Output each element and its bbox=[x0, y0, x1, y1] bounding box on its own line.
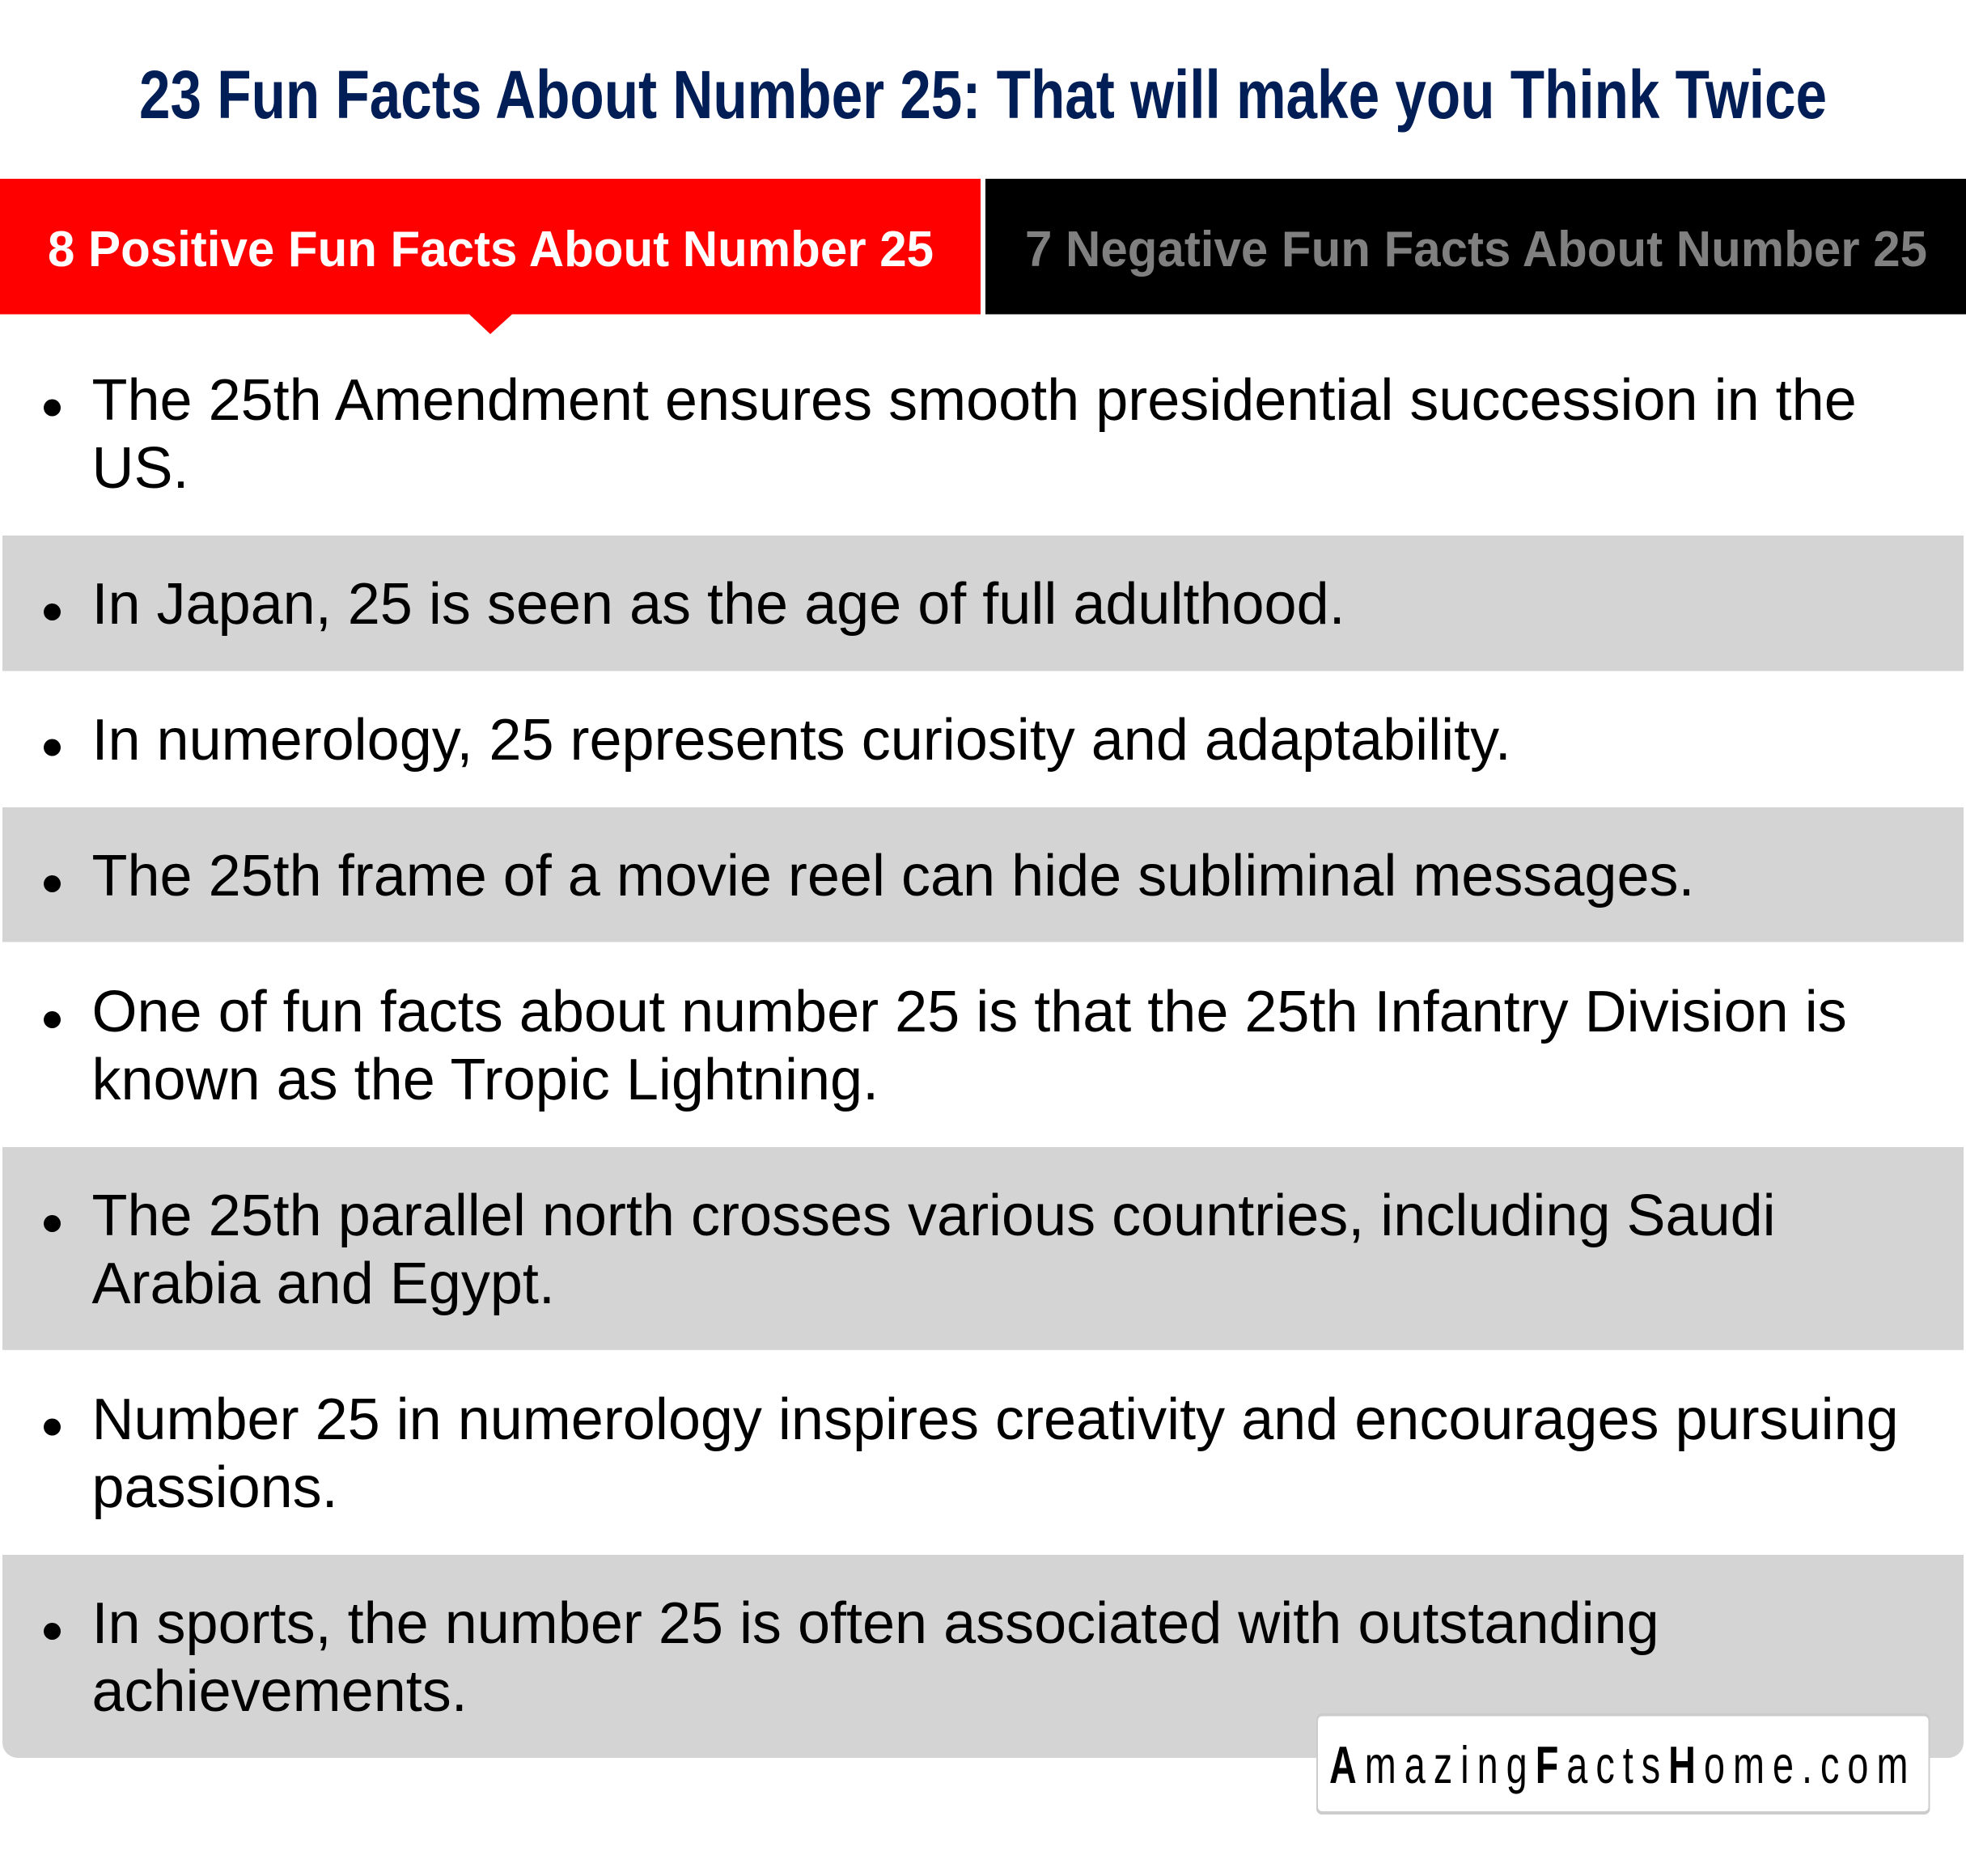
tab: negative facts (inactive): 7 Negative Fun Facts About Number 25 bbox=[1025, 222, 1927, 277]
fact 2: In Japan, 25 is seen as the age of full adulthood. bbox=[92, 572, 1345, 637]
fact 7: passions. bbox=[92, 1455, 338, 1520]
fact 5: One of fun facts about number 25 is that the 25th Infantry Division is bbox=[92, 980, 1847, 1044]
tab: positive facts (active) bbox=[0, 179, 981, 334]
fact list panel bbox=[2, 368, 1964, 1758]
fact 4: The 25th frame of a movie reel can hide subliminal messages. bbox=[92, 844, 1694, 908]
fact 8: achievements. bbox=[92, 1659, 468, 1724]
fact 7 bbox=[44, 1387, 1899, 1520]
fact 6: Arabia and Egypt. bbox=[92, 1251, 555, 1316]
fact 8 bbox=[2, 1555, 1964, 1758]
fact 1: US. bbox=[92, 436, 189, 501]
fact 5 bbox=[44, 980, 1847, 1112]
fact 1 bbox=[44, 368, 1857, 501]
tab: positive facts (active): 8 Positive Fun Facts About Number 25 bbox=[48, 222, 934, 277]
fact 1: The 25th Amendment ensures smooth presidential succession in the bbox=[92, 368, 1857, 433]
fact 2 bbox=[2, 536, 1964, 671]
fact 3: In numerology, 25 represents curiosity and adaptability. bbox=[92, 708, 1511, 773]
fact 5: known as the Tropic Lightning. bbox=[92, 1048, 879, 1112]
watermark: AmazingFactsHome.com bbox=[1316, 1713, 1930, 1815]
fact 6: The 25th parallel north crosses various countries, including Saudi bbox=[92, 1184, 1776, 1248]
watermark: AmazingFactsHome.com: AmazingFactsHome.com bbox=[1329, 1737, 1916, 1795]
fact 6 bbox=[2, 1147, 1964, 1350]
fact 4 bbox=[2, 807, 1964, 942]
tab: negative facts (inactive) bbox=[985, 179, 1966, 314]
fact 8: In sports, the number 25 is often associated with outstanding bbox=[92, 1591, 1659, 1656]
fact 7: Number 25 in numerology inspires creativity and encourages pursuing bbox=[92, 1387, 1899, 1452]
